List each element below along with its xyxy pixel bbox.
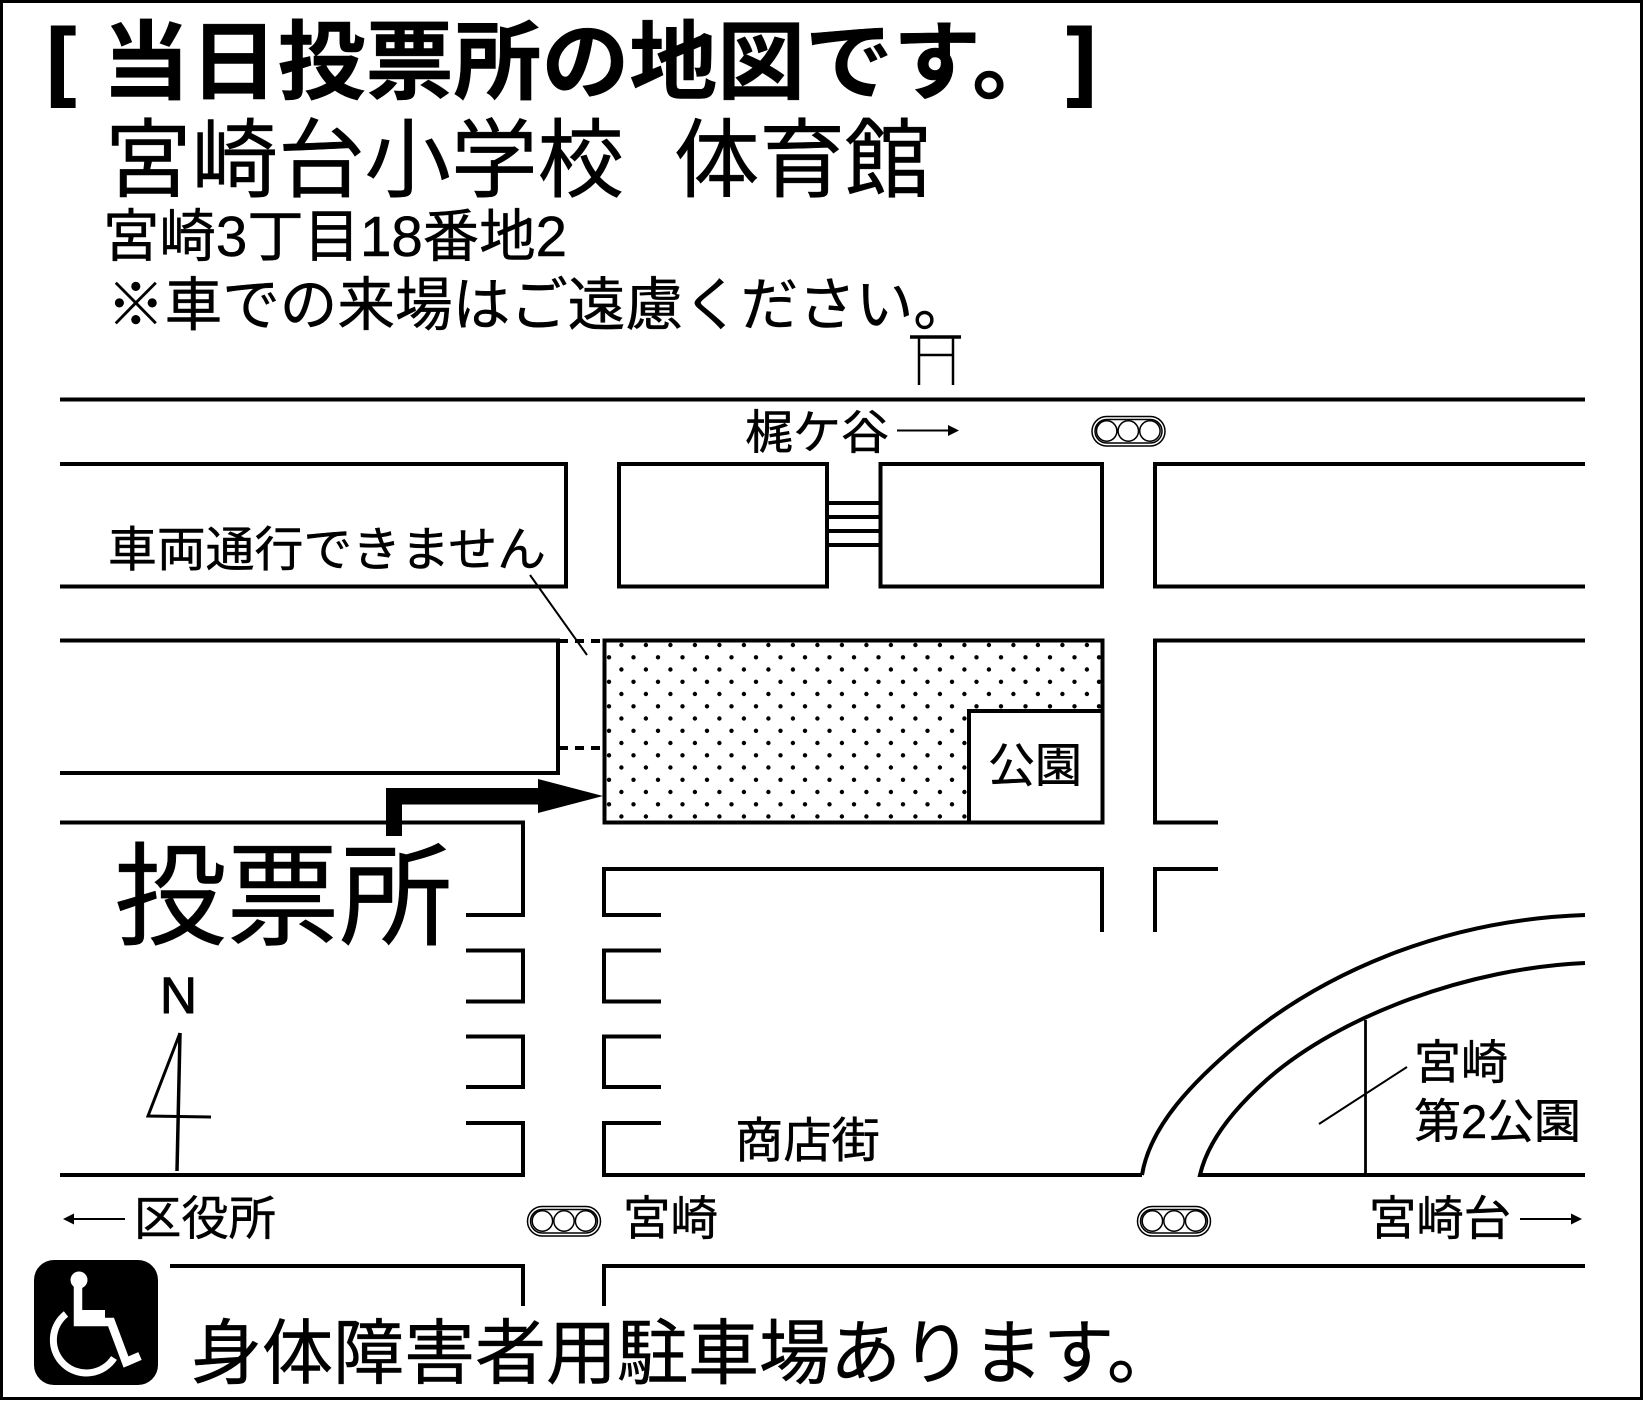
park block: 公園 xyxy=(988,739,1082,792)
polling site block xyxy=(604,640,1102,822)
label: Kajigaya with arrow: 梶ケ谷 xyxy=(745,406,889,459)
dashed closed road xyxy=(559,641,604,748)
label: polling place: 投票所 xyxy=(114,835,452,960)
label: Miyazaki: 宮崎 xyxy=(623,1192,718,1245)
label: shopping street: 商店街 xyxy=(735,1115,880,1168)
label: no vehicles: 車両通行できません xyxy=(108,524,546,577)
traffic signal: Miyazaki xyxy=(528,1206,600,1236)
label: Miyazakidai with arrow xyxy=(1369,1192,1582,1245)
address: 宮崎3丁目18番地2 xyxy=(103,205,567,269)
venue name: 体育館 xyxy=(674,113,930,209)
label: Miyazakidai with arrow: 宮崎台 xyxy=(1369,1192,1511,1245)
venue name: 宮崎台小学校 xyxy=(105,113,624,209)
title: [ xyxy=(47,12,76,108)
notice: no cars: ※車での来場はご遠慮ください。 xyxy=(107,273,971,338)
icon: shrine gate xyxy=(910,337,961,385)
label: ward office with arrow: 区役所 xyxy=(134,1192,276,1245)
label: Miyazaki No.2 park: 宮崎 xyxy=(1414,1036,1508,1089)
north arrow xyxy=(148,967,211,1171)
park 2: boundary and leader xyxy=(1319,1020,1407,1175)
arrow to polling site xyxy=(386,779,603,836)
icon: wheelchair xyxy=(34,1260,158,1385)
footbridge stripes xyxy=(827,503,881,545)
notice: accessible parking: 身体障害者用駐車場あります。 xyxy=(191,1315,1178,1394)
traffic signal: north xyxy=(1092,416,1165,446)
title: ] xyxy=(1067,12,1096,108)
north arrow: N xyxy=(160,967,197,1024)
park block xyxy=(969,711,1102,822)
leader: no vehicles xyxy=(530,575,587,655)
label: Miyazaki No.2 park xyxy=(1414,1036,1581,1148)
road network xyxy=(60,400,1585,1306)
label: Kajigaya with arrow xyxy=(745,406,959,459)
label: ward office with arrow xyxy=(63,1192,276,1245)
venue name xyxy=(105,113,930,209)
label: Miyazaki No.2 park: 第2公園 xyxy=(1414,1095,1581,1148)
title: 当日投票所の地図です。 xyxy=(102,15,1060,111)
traffic signal: east xyxy=(1138,1206,1210,1236)
